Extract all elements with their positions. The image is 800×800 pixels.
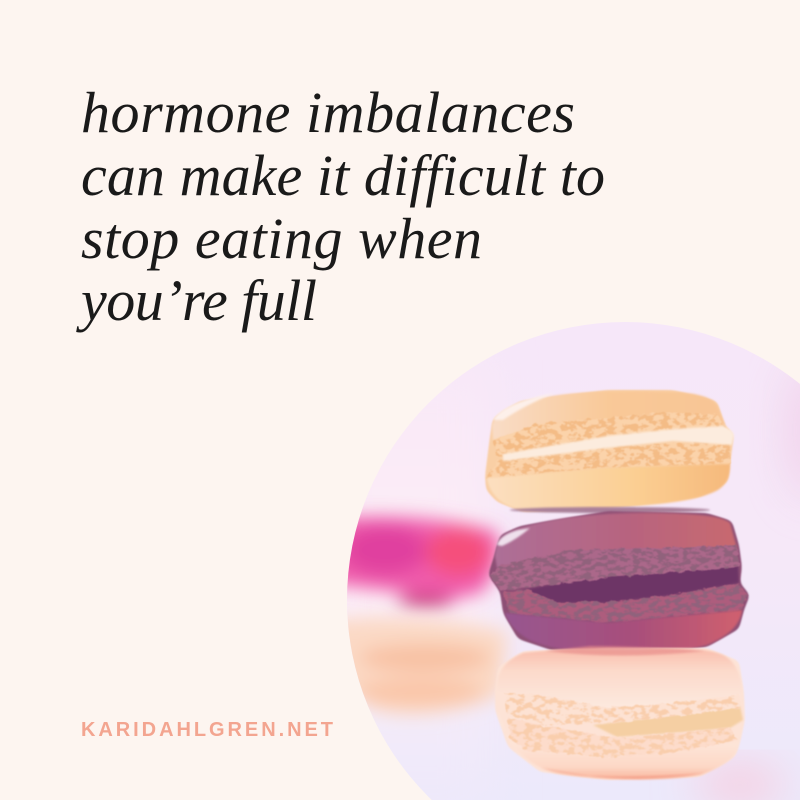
top macaron: orange xyxy=(485,390,734,512)
lower foot xyxy=(507,717,738,757)
base shadow xyxy=(550,770,696,780)
title: hormone imbalances xyxy=(81,80,575,145)
shell highlight xyxy=(497,528,530,546)
contact shadow xyxy=(510,507,710,513)
upper foot xyxy=(505,693,740,725)
title xyxy=(76,80,605,333)
middle macaron: plum xyxy=(488,507,750,655)
top shell xyxy=(495,513,737,568)
ganache xyxy=(524,566,740,603)
upper foot xyxy=(490,545,740,590)
website footer: KARIDAHLGREN.NET xyxy=(81,719,333,741)
title: you’re full xyxy=(76,268,317,333)
title: stop eating when xyxy=(81,206,482,271)
shell highlight xyxy=(494,396,548,421)
photo background xyxy=(320,320,800,800)
top shell xyxy=(492,391,725,440)
bottom shell xyxy=(505,610,742,653)
silhouette xyxy=(488,511,750,655)
blurred peach macaron xyxy=(320,618,507,715)
bottom shell xyxy=(487,464,730,511)
blurred pink macaron xyxy=(315,517,499,607)
silhouette xyxy=(495,648,745,780)
upper foot xyxy=(493,412,730,457)
top shell xyxy=(501,648,737,676)
silhouette xyxy=(485,390,734,512)
lower foot xyxy=(502,583,748,623)
cream xyxy=(503,426,734,461)
bottom macaron: pale peach xyxy=(495,646,745,780)
circular photo: macarons xyxy=(315,320,800,800)
lower foot xyxy=(487,441,731,478)
title: can make it difficult to xyxy=(81,143,605,208)
shell shadow from plum macaron xyxy=(545,646,705,656)
cream xyxy=(593,706,743,737)
bottom shell xyxy=(528,756,730,781)
